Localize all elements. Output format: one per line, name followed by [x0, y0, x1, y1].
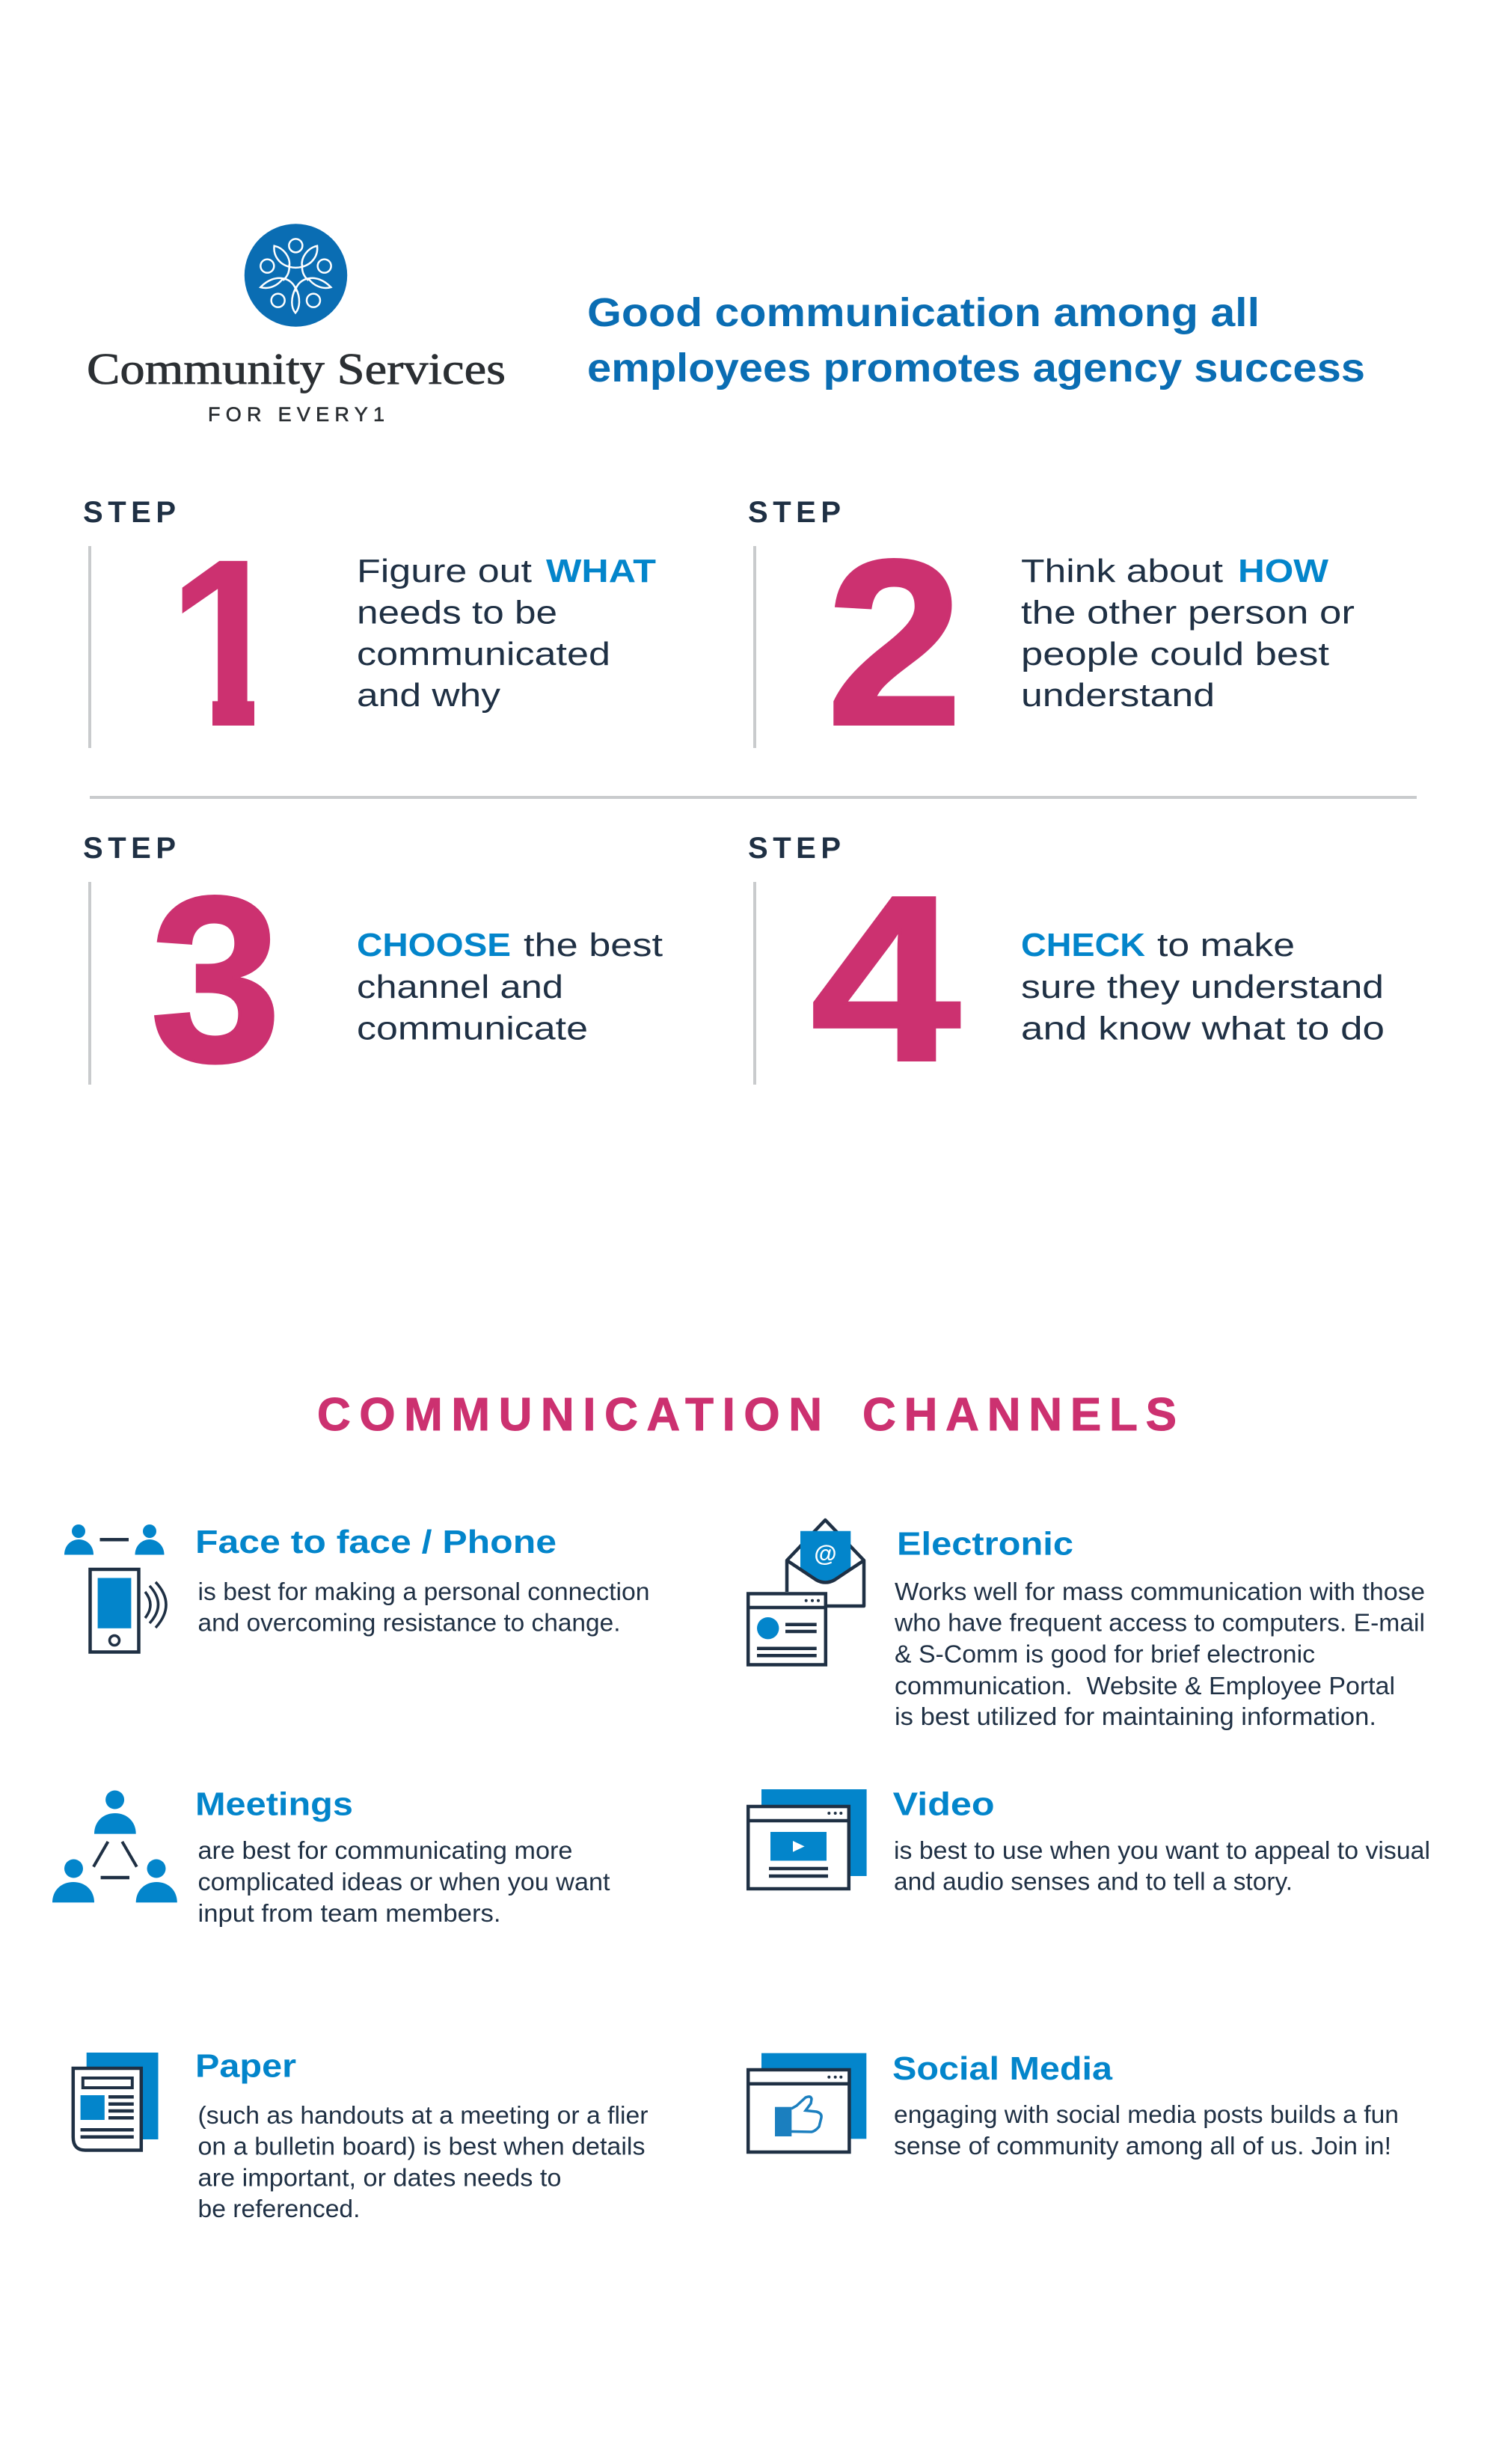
logo: Community Services for Every1 — [87, 224, 506, 426]
step 4 numeral: 4 — [811, 847, 962, 1110]
body: face to face / phone: and overcoming resistance to change. — [197, 1609, 621, 1637]
step 3 text: the best — [524, 927, 663, 963]
heading: video: Video — [893, 1786, 995, 1823]
logo tagline: FOR EVERY1 — [208, 403, 384, 426]
headline — [587, 290, 1365, 390]
headline: employees promotes agency success — [587, 346, 1365, 390]
body: social media: engaging with social media posts builds a fun — [894, 2100, 1399, 2128]
icon: video window — [748, 1789, 867, 1889]
panel: step 2 — [748, 496, 1355, 774]
panel: step 1 — [83, 496, 656, 776]
step 2 numeral: 2 — [827, 511, 963, 774]
step 1 text: communicated — [357, 636, 610, 672]
heading: face to face / phone: Face to face / Phone — [195, 1524, 557, 1560]
step 1 text: Figure out — [357, 553, 532, 589]
step 2 text: Think about — [1021, 553, 1223, 589]
step 3 numeral: 3 — [150, 848, 281, 1111]
body: electronic — [894, 1578, 1425, 1730]
section heading: communication channels: CHANNELS — [862, 1389, 1177, 1441]
body: face to face / phone: is best for making a personal connection — [197, 1578, 649, 1605]
body: video: and audio senses and to tell a story. — [894, 1867, 1293, 1895]
step 2 text: people could best — [1021, 636, 1329, 672]
section heading: communication channels: COMMUNICATION — [317, 1389, 822, 1441]
body: meetings — [197, 1836, 610, 1927]
icon: three people — [52, 1791, 177, 1902]
icon: two people and phone — [64, 1524, 166, 1652]
body: face to face / phone — [197, 1578, 649, 1637]
body: electronic: Works well for mass communication with those — [895, 1578, 1425, 1605]
heading: electronic: Electronic — [897, 1526, 1073, 1562]
body: video — [894, 1836, 1430, 1895]
heading: meetings: Meetings — [195, 1786, 353, 1823]
panel: face to face / phone — [64, 1524, 649, 1652]
panel: step 3 — [83, 832, 663, 1111]
panel: video — [748, 1786, 1430, 1895]
step 1 text: needs to be — [357, 594, 557, 631]
step 3 text: communicate — [357, 1010, 588, 1047]
body: paper: (such as handouts at a meeting or a flier — [197, 2101, 649, 2129]
step 2 text: HOW — [1238, 553, 1329, 589]
step 3 label: STEP — [83, 832, 176, 865]
step 1 text: and why — [357, 677, 500, 714]
body: meetings: are best for communicating more — [197, 1836, 573, 1864]
body: paper: on a bulletin board) is best when details — [197, 2133, 645, 2160]
panel: step 4 — [748, 832, 1385, 1110]
divider — [90, 796, 1417, 799]
step 3 text: channel and — [357, 969, 563, 1005]
step 1 text: WHAT — [546, 553, 656, 589]
panel: social media — [748, 2050, 1399, 2160]
heading: paper: Paper — [195, 2048, 296, 2085]
icon: envelope and web page — [748, 1520, 864, 1665]
body: meetings: input from team members. — [197, 1899, 501, 1927]
icon: thumbs up window — [748, 2053, 866, 2152]
section heading: communication channels — [317, 1389, 1177, 1441]
body: paper — [197, 2101, 649, 2222]
heading: social media: Social Media — [892, 2050, 1113, 2087]
step 1 numeral: 1 — [168, 509, 287, 776]
body: electronic: & S-Comm is good for brief electronic — [895, 1640, 1315, 1668]
icon: newspaper — [73, 2053, 159, 2150]
body: video: is best to use when you want to appeal to visual — [894, 1836, 1430, 1864]
headline: Good communication among all — [587, 290, 1260, 335]
panel: paper — [73, 2048, 649, 2222]
icon: logo emblem — [245, 224, 347, 327]
step 2 text — [1021, 553, 1355, 714]
body: social media: sense of community among all of us. Join in! — [894, 2132, 1391, 2160]
at sign: @ — [814, 1540, 837, 1566]
step 2 label: STEP — [748, 496, 841, 529]
step 4 text: CHECK — [1021, 927, 1145, 963]
body: meetings: complicated ideas or when you want — [197, 1868, 610, 1895]
step 4 text — [1021, 927, 1385, 1047]
logo wordmark: Community Services — [87, 344, 506, 393]
step 4 text: sure they understand — [1021, 969, 1384, 1005]
step 1 label: STEP — [83, 496, 176, 529]
body: paper: are important, or dates needs to — [197, 2164, 561, 2192]
body: electronic: is best utilized for maintaining information. — [895, 1703, 1376, 1730]
body: electronic: communication. Website & Employee Portal — [895, 1672, 1395, 1700]
step 2 text: understand — [1021, 677, 1215, 714]
step 4 label: STEP — [748, 832, 841, 865]
panel: meetings — [52, 1786, 610, 1927]
panel: electronic — [748, 1520, 1425, 1730]
step 2 text: the other person or — [1021, 594, 1355, 631]
body: electronic: who have frequent access to computers. E-mail — [894, 1609, 1425, 1637]
step 3 text: CHOOSE — [357, 927, 511, 963]
body: paper: be referenced. — [197, 2195, 361, 2222]
step 4 text: to make — [1157, 927, 1295, 963]
step 3 text — [357, 927, 663, 1047]
body: social media — [894, 2100, 1399, 2160]
step 1 text — [357, 553, 656, 714]
step 4 text: and know what to do — [1021, 1010, 1385, 1047]
